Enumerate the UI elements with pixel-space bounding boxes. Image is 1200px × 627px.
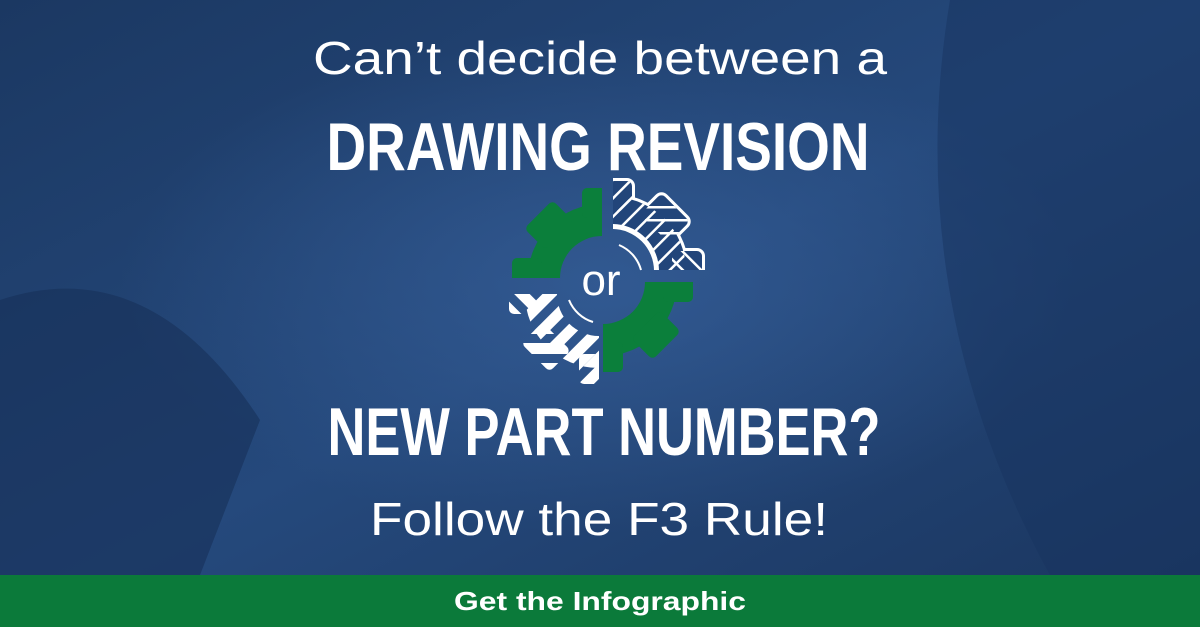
footer button bar: Get the Infographic (454, 586, 746, 616)
title line 1: Can’t decide between a (313, 32, 887, 84)
icon: gear split (509, 181, 702, 384)
gear quadrant hatched top-right (613, 178, 705, 270)
inner arcs (569, 245, 641, 322)
footer button bar (0, 575, 1200, 627)
gear quadrant striped bottom-left (509, 294, 599, 384)
gear quadrant green top-left (512, 188, 602, 278)
gear quadrant green bottom-right (603, 282, 693, 372)
or: or (581, 256, 621, 305)
title line 2: DRAWING REVISION (326, 109, 870, 185)
subtitle: Follow the F3 Rule! (370, 493, 828, 545)
title line 3: NEW PART NUMBER? (328, 394, 880, 470)
